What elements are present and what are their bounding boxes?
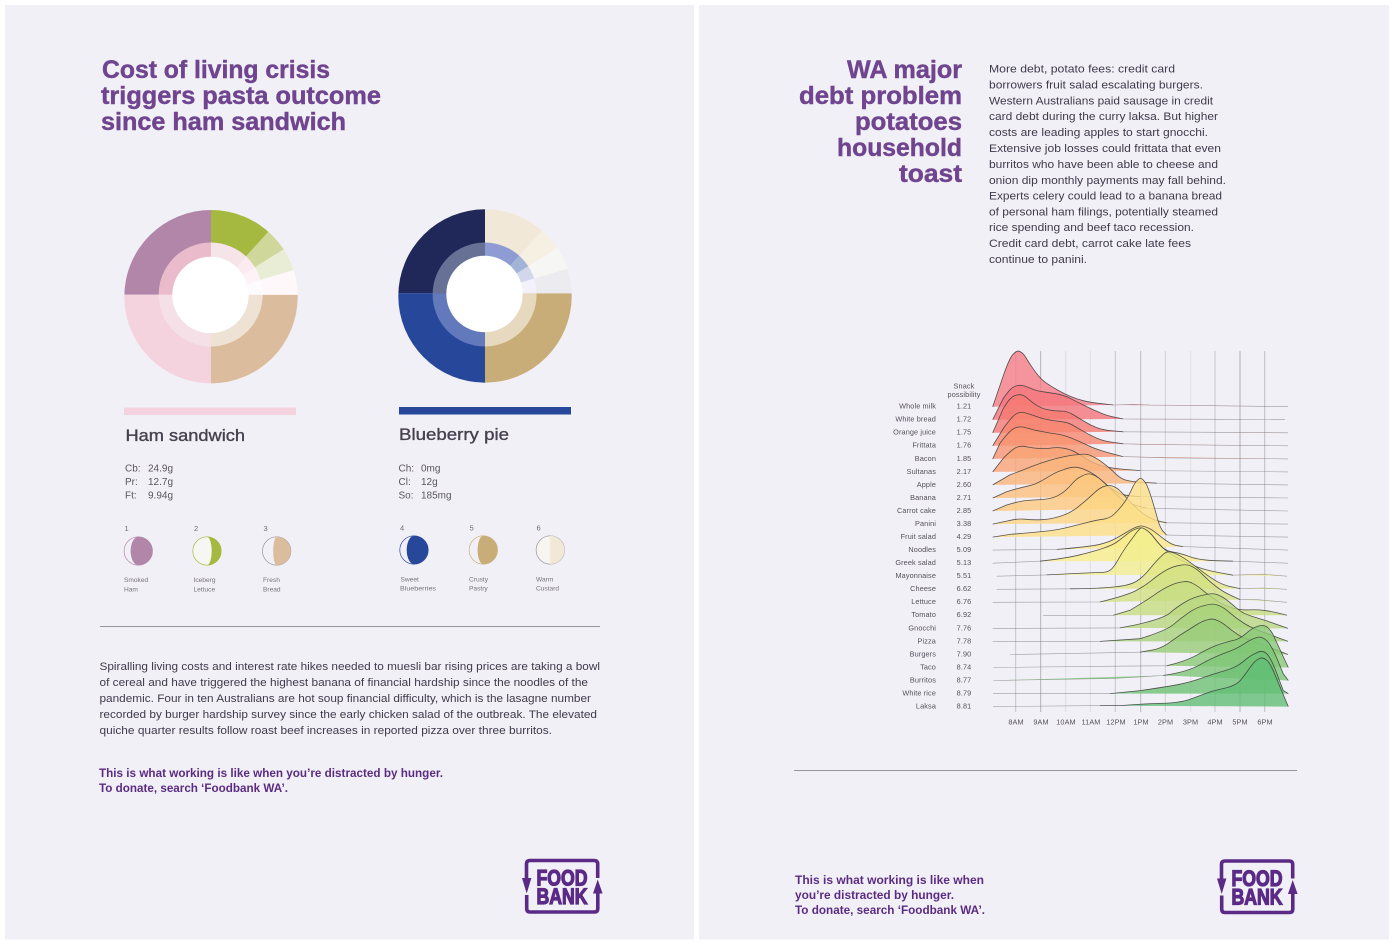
row labels: Whole milk [899,402,936,411]
row values: 2.17 [957,467,971,476]
nutrition: blueberry pie: So: [398,490,414,502]
nutrition: ham sandwich: 12.7g [148,477,173,488]
row labels: Taco [920,662,936,671]
snack possibility header [948,382,981,399]
row values: 1.21 [957,402,971,411]
x axis hour labels: 3PM [1183,718,1198,726]
body text: right: costs are leading apples to start gnocchi. [989,127,1208,139]
row labels [893,402,937,710]
row values: 5.13 [957,558,971,567]
row values: 5.09 [957,545,971,554]
row values: 1.75 [957,428,971,437]
title: WA major debt: household [837,134,962,162]
logo: foodbank right [1217,861,1298,912]
callout: donate left: This is what working is like when you’re distracted by hunger. [99,768,443,780]
row labels: Mayonnaise [895,571,936,580]
nutrition: ham sandwich [125,464,173,502]
row values: 6.76 [957,597,971,606]
ingredient 5: crusty pastry: Crusty [469,576,489,584]
ridgeline chart: snack possibility by hour [893,351,1288,726]
colour bar: ham sandwich [124,408,296,415]
row values: 7.78 [957,636,971,645]
ingredient 5: crusty pastry: 5 [470,524,474,532]
row values: 1.76 [957,441,971,450]
nutrition: blueberry pie [398,464,452,502]
donut chart: blueberry pie [398,209,572,383]
ingredient 4: sweet blueberries [400,524,437,592]
row labels: Fruit salad [901,532,936,541]
body text: right: of personal ham filings, potentially steamed [989,206,1218,218]
row labels: Orange juice [893,428,936,437]
ingredient 1: smoked ham: 1 [124,524,129,533]
ingredient 4: sweet blueberries: Sweet [400,576,419,584]
title: cost of living: Cost of living crisis [102,56,330,84]
row labels: Panini [915,519,936,528]
nutrition: blueberry pie: Cl: [398,477,411,488]
body text: left: pandemic. Four in ten Australians are hot soup financial difficulty, which is the lasagne number [100,693,591,705]
row values: 7.76 [957,623,971,632]
snack possibility header: Snack [954,382,975,390]
row values: 3.38 [957,519,971,528]
callout: donate right: you’re distracted by hunger. [795,890,954,902]
ingredient 2: iceberg lettuce: Iceberg [194,577,216,584]
row values: 7.90 [957,649,971,658]
row values: 2.60 [957,480,971,489]
title: WA major debt: toast [899,160,963,188]
row values: 6.92 [957,610,971,619]
ingredient 3: fresh bread: Bread [263,586,281,594]
x axis hour labels: 8AM [1008,718,1024,726]
title: WA major debt: debt problem [799,82,962,110]
logo: foodbank left [522,860,603,912]
x axis hour labels: 6PM [1257,718,1273,726]
row labels: Noodles [908,545,936,554]
row values: 2.71 [957,493,971,502]
x axis hour labels: 4PM [1207,718,1223,726]
callout: donate right: This is what working is like when [795,875,984,887]
row labels: Banana [910,493,937,502]
body text: right: card debt during the curry laksa. But higher [989,111,1218,123]
row labels: Burgers [910,649,936,658]
x axis hour labels: 5PM [1232,718,1248,726]
row values: 1.85 [957,454,971,463]
row labels: Lettuce [911,597,936,606]
logo: foodbank right: FOOD [1232,866,1282,891]
body text: right: Extensive job losses could frittata that even [989,143,1221,155]
ingredient 2: iceberg lettuce: Lettuce [194,586,215,594]
row values: 8.81 [957,702,971,710]
nutrition: ham sandwich: 9.94g [148,490,173,502]
row labels: Pizza [918,636,937,645]
ingredient 6: warm custard: Warm [536,576,554,584]
ingredient 6: warm custard: Custard [536,586,559,592]
title: cost of living: since ham sandwich [101,108,346,136]
row labels: Bacon [915,454,936,463]
ingredient 3: fresh bread: 3 [264,524,268,533]
x axis hour labels: 2PM [1158,718,1173,726]
body text: right: borrowers fruit salad escalating burgers. [989,80,1203,92]
row labels: Cheese [910,584,936,593]
ridges [993,351,1288,707]
title: cost of living [101,56,381,136]
ingredient 4: sweet blueberries: 4 [400,524,404,532]
logo: foodbank right: BANK [1232,884,1283,910]
body text: right: More debt, potato fees: credit card [989,64,1175,76]
ingredient 5: crusty pastry: Pastry [469,586,488,592]
body text: left: of cereal and have triggered the highest banana of financial hardship since the noodles of the [100,677,588,689]
nutrition: blueberry pie: 185mg [421,490,452,502]
body text: right: Credit card debt, carrot cake late fees [989,238,1191,250]
heading: ham sandwich: Ham sandwich [126,427,245,445]
row values: 6.62 [957,584,971,593]
callout: donate right [795,875,985,917]
body text: right: burritos who have been able to cheese and [989,159,1218,171]
body text: left: quiche quarter results follow roast beef increases in reported pizza over three burritos. [100,725,552,737]
x axis hour labels: 12PM [1106,718,1126,726]
body text: right: continue to panini. [989,254,1087,266]
x axis hour labels: 11AM [1082,718,1100,726]
ingredient 2: iceberg lettuce [193,524,221,594]
body text: right: Experts celery could lead to a banana bread [989,190,1222,202]
row labels: White rice [902,688,936,698]
x axis hour labels: 9AM [1033,718,1049,726]
nutrition: ham sandwich: Ft: [125,490,137,502]
row values: 1.72 [957,415,971,424]
callout: donate right: To donate, search ‘Foodbank WA’. [795,905,985,917]
row values [957,402,971,710]
ingredient 4: sweet blueberries: Blueberries [400,586,437,592]
colour bar: blueberry pie [399,407,571,414]
x axis hour labels [1008,718,1273,726]
nutrition: blueberry pie: 0mg [421,464,440,474]
row labels: Sultanas [907,467,936,476]
panel: right page [699,5,1389,940]
row labels: Tomato [911,610,936,619]
row labels: Gnocchi [908,623,936,632]
ingredient 6: warm custard [536,524,564,592]
ingredient 1: smoked ham [124,524,152,594]
body text: right [989,64,1226,266]
row labels: Carrot cake [897,506,936,515]
nutrition: ham sandwich: Cb: [125,464,141,474]
row values: 8.77 [957,675,971,684]
heading: blueberry pie: Blueberry pie [399,426,509,444]
body text: right: Western Australians paid sausage in credit [989,96,1214,108]
snack possibility header: possibility [948,390,981,399]
body text: left [100,661,600,737]
title: WA major debt: potatoes [855,108,962,136]
x axis hour labels: 1PM [1133,718,1149,726]
row labels: Burritos [910,675,936,684]
nutrition: ham sandwich: Pr: [125,477,138,488]
row values: 8.79 [957,688,971,698]
ingredient 3: fresh bread [262,524,291,594]
logo: foodbank left: FOOD [536,866,588,890]
body text: right: onion dip monthly payments may fall behind. [989,175,1226,187]
nutrition: blueberry pie: 12g [421,477,438,488]
ingredient 1: smoked ham: Ham [124,586,138,594]
ingredient 1: smoked ham: Smoked [124,577,149,584]
title: cost of living: triggers pasta outcome [101,82,381,110]
body text: left: Spiralling living costs and interest rate hikes needed to muesli bar rising prices are taking a bowl [100,661,600,673]
ingredient 5: crusty pastry [469,524,498,592]
row values: 4.29 [957,532,971,541]
row labels: Frittata [912,441,937,450]
title: WA major debt: WA major [847,56,962,84]
row labels: Laksa [916,702,937,710]
nutrition: blueberry pie: Ch: [398,464,414,474]
row values: 2.85 [957,506,971,515]
row labels: White bread [895,415,936,424]
ingredient 6: warm custard: 6 [536,524,541,532]
donut chart: ham sandwich [124,210,298,384]
x axis hour labels: 10AM [1056,718,1076,726]
logo: foodbank left: BANK [536,884,588,909]
title: WA major debt [799,56,963,188]
nutrition: ham sandwich: 24.9g [148,464,173,474]
row values: 5.51 [957,571,971,580]
ingredient 3: fresh bread: Fresh [263,577,280,584]
body text: right: rice spending and beef taco recession. [989,222,1194,234]
row values: 8.74 [957,662,971,671]
row labels: Apple [917,480,936,489]
body text: left: recorded by burger hardship survey since the early chicken salad of the outbreak. The elevated [100,709,597,721]
row labels: Greek salad [895,558,936,567]
callout: donate left [99,768,443,795]
ingredient 2: iceberg lettuce: 2 [194,524,198,533]
panel: left page [5,5,694,940]
callout: donate left: To donate, search ‘Foodbank WA’. [99,783,288,795]
